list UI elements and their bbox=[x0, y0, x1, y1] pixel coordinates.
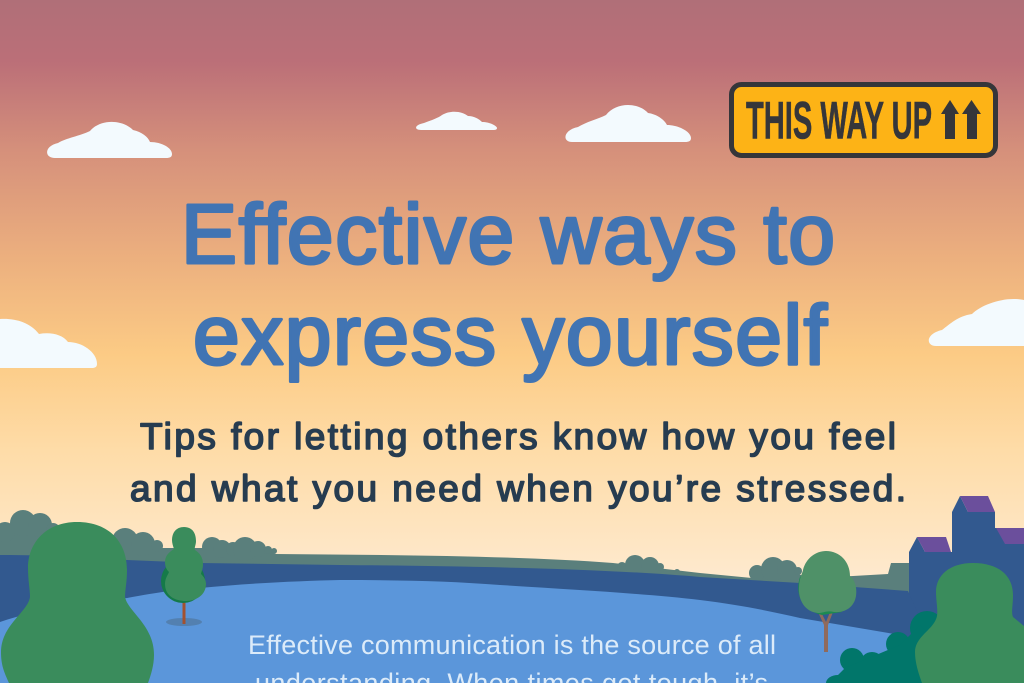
purple roofs bbox=[917, 496, 1024, 552]
crown shadow bbox=[798, 560, 842, 615]
tree: left foreground bbox=[1, 522, 154, 683]
intro paragraph: Effective communication is the source of all bbox=[248, 630, 776, 660]
bush: teal bbox=[826, 611, 944, 683]
crown shadow bbox=[161, 559, 205, 603]
crown bbox=[165, 527, 206, 601]
far hill with treeline bbox=[0, 510, 910, 600]
cloud: top right bbox=[565, 105, 691, 142]
trunk bbox=[818, 612, 833, 652]
title: express yourself bbox=[193, 288, 828, 382]
trunk bbox=[182, 600, 186, 624]
tree shadow bbox=[166, 618, 202, 626]
icon: up arrows bbox=[941, 100, 981, 139]
cloud: top left bbox=[47, 122, 172, 158]
title: Effective ways to bbox=[181, 187, 835, 281]
tree: right foreground bbox=[915, 563, 1024, 683]
tree: small on lake bbox=[161, 527, 206, 626]
far shore bbox=[0, 555, 930, 683]
crown bbox=[799, 551, 856, 613]
cloud: mid right bbox=[929, 299, 1024, 346]
town buildings bbox=[909, 496, 1024, 640]
sign: this way up bbox=[732, 84, 996, 156]
lake bbox=[0, 580, 930, 683]
subtitle: and what you need when you’re stressed. bbox=[130, 468, 906, 509]
tree: right on lake bbox=[798, 551, 856, 652]
title bbox=[181, 187, 835, 382]
cloud: mid left bbox=[0, 319, 97, 368]
subtitle bbox=[130, 416, 906, 509]
cloud: top centre bbox=[416, 112, 497, 130]
subtitle: Tips for letting others know how you feel bbox=[140, 416, 896, 457]
intro paragraph bbox=[248, 630, 776, 683]
tower roof sides bbox=[909, 496, 968, 552]
